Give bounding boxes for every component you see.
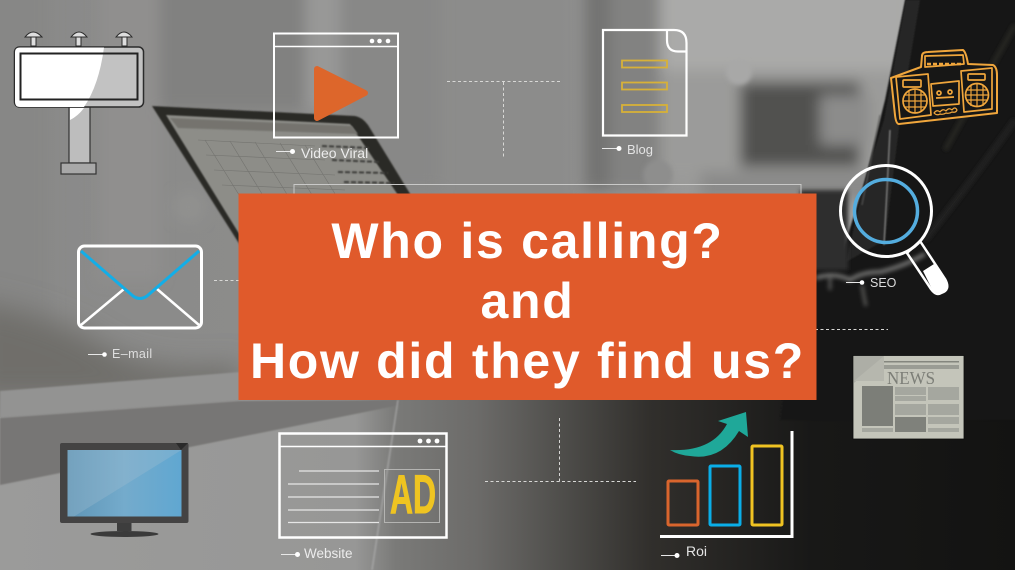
laptop screen bbox=[152, 106, 420, 245]
label: Blog bbox=[602, 142, 653, 157]
icon: blog document bbox=[603, 30, 686, 136]
icon: envelope bbox=[78, 246, 202, 328]
label: Roi bbox=[661, 543, 707, 559]
label: Website bbox=[281, 546, 353, 561]
icon: video viral browser window bbox=[274, 34, 398, 138]
label: Website: Website bbox=[304, 546, 353, 561]
title text bbox=[250, 213, 805, 389]
label: E-mail: E–mail bbox=[112, 347, 153, 361]
label: SEO bbox=[846, 276, 897, 290]
icon: SEO magnifying glass bbox=[840, 166, 947, 294]
label: Blog: Blog bbox=[627, 142, 653, 157]
icon: play triangle bbox=[317, 69, 365, 118]
text: AD: AD bbox=[390, 463, 436, 525]
icon: website browser with AD bbox=[280, 434, 446, 538]
title text: Who is calling? bbox=[331, 213, 724, 269]
icon: boombox bbox=[891, 50, 997, 124]
label: E-mail bbox=[88, 347, 153, 361]
title text: How did they find us? bbox=[250, 333, 805, 389]
icon: teal growth arrow bbox=[670, 412, 748, 457]
text: NEWS: NEWS bbox=[887, 368, 935, 388]
dashed connector lines bbox=[214, 82, 888, 482]
label: Roi: Roi bbox=[686, 543, 707, 559]
desk strip and floor bbox=[0, 400, 1015, 570]
icon: billboard bbox=[14, 32, 144, 174]
person in dark clothing bbox=[780, 0, 1015, 420]
icon: television monitor bbox=[60, 443, 188, 537]
icon: newspaper bbox=[853, 356, 964, 439]
label: SEO: SEO bbox=[870, 276, 897, 290]
title text: and bbox=[480, 273, 574, 329]
banner: orange title panel bbox=[238, 194, 816, 400]
icon: ROI bar chart with arrow bbox=[660, 412, 792, 536]
label: Video Viral: Video Viral bbox=[301, 145, 368, 161]
